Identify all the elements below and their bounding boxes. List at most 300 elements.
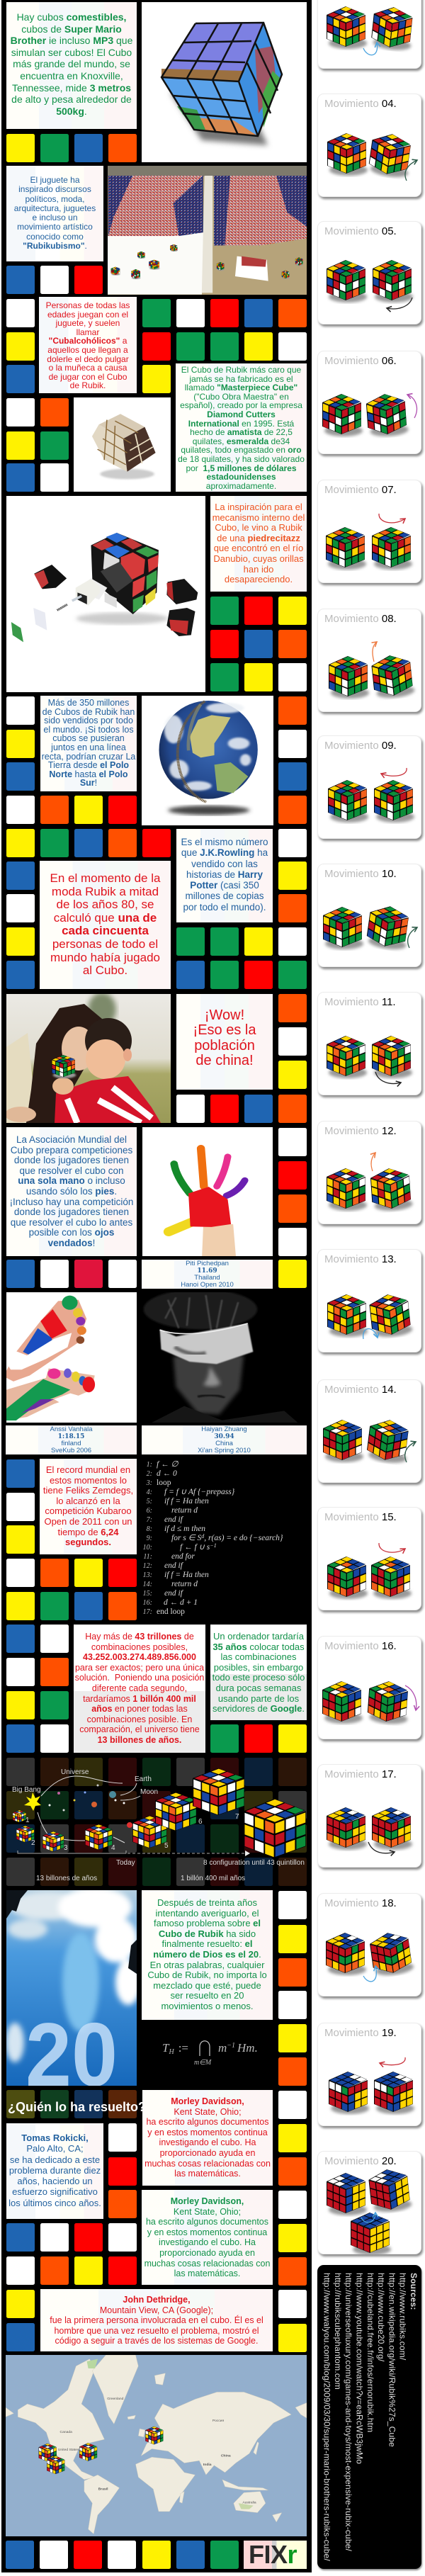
- panel: Tomas Rokicki: años, haciendo un: [17, 2176, 93, 2186]
- card: move 13: [317, 1249, 421, 1352]
- card: move 18: Movimiento 18.: [324, 1897, 397, 1909]
- sources panel: http://www.rubiks.com/: [398, 2273, 408, 2360]
- panel: John Dethridge: hombre que una vez resuelto el problema, mostró el: [54, 2326, 259, 2336]
- panel: Morley Davidson (green): proporcionado ayuda en: [159, 2248, 255, 2258]
- card: move 17: Movimiento 17.: [324, 1768, 397, 1780]
- caption: Anssi Vanhala: 1:18.15: [58, 1433, 84, 1440]
- panel: world record: tiempo de 6,24: [57, 1527, 119, 1537]
- image: mother and child with a cube: [6, 994, 171, 1123]
- panel: Masterpiece Cube: International en 1995. Está: [188, 419, 294, 429]
- panel: world cube association competitions: que resolver el cubo con: [19, 1165, 124, 1176]
- panel: 43 trillion combinations: solución. Poniendo una posición: [75, 1673, 204, 1683]
- panel: Masterpiece Cube: El Cubo de Rubik más caro que: [181, 365, 301, 375]
- algorithm listing: 1:: [147, 1461, 152, 1469]
- panel: world cube association competitions: que resolver el cubo lo antes: [11, 1217, 132, 1228]
- panel: political speeches and Rubikubism: e incluso un: [32, 213, 78, 222]
- world map with solver locations: India: [203, 2463, 212, 2466]
- panel: John Dethridge: [40, 2289, 273, 2351]
- panel: 43 trillion combinations: para ser exactos; pero una única: [75, 1663, 204, 1673]
- algorithm listing: 15:: [143, 1590, 152, 1598]
- panel: Morley Davidson (red): [142, 2090, 273, 2186]
- card: move 17: [317, 1764, 421, 1868]
- panel: 43 trillion combinations: [74, 1625, 205, 1753]
- chart: universe timeline with cubes: 4: [111, 1844, 115, 1852]
- panel: Morley Davidson (red): proporcionado ayuda en: [160, 2148, 255, 2158]
- panel: one in fifty people played: al Cubo.: [83, 964, 128, 977]
- algorithm listing: return d: [171, 1506, 198, 1515]
- algorithm listing: end if: [164, 1561, 184, 1570]
- panel: 350 million cubes sold: Tierra desde el Polo: [48, 760, 129, 770]
- panel: Cubalcoholicos: de jugar con el Cubo: [49, 372, 127, 382]
- algorithm listing: end loop: [157, 1608, 185, 1616]
- chart: universe timeline with cubes: Big Bang: [12, 1786, 41, 1794]
- panel: world record: competición Kubaroo: [45, 1506, 132, 1516]
- panel: computer time and Google: Un ordenador tardaría: [213, 1631, 304, 1642]
- panel: 350 million cubes sold: juntos en una línea: [51, 742, 126, 752]
- algorithm listing: 11:: [143, 1553, 152, 1561]
- algorithm listing: 10:: [143, 1544, 152, 1552]
- card: move 12: Movimiento 12.: [324, 1125, 397, 1137]
- caption: Haiyan Zhuang: [142, 1425, 307, 1454]
- algorithm listing: −1: [210, 1542, 217, 1549]
- algorithm listing: 12:: [143, 1562, 152, 1570]
- caption: Anssi Vanhala: Anssi Vanhala: [50, 1425, 93, 1433]
- panel: political speeches and Rubikubism: El juguete ha: [30, 175, 80, 185]
- panel: Morley Davidson (green): Kent State, Ohio;: [174, 2207, 241, 2217]
- image: blindfolded man: [143, 1292, 298, 1423]
- panel: world cube association competitions: posible con los ojos: [29, 1227, 114, 1238]
- sources panel: http://rubikscubephantom.com: [333, 2273, 343, 2390]
- panel: same number as J.K. Rowling sold: [176, 829, 273, 922]
- caption: Haiyan Zhuang: Haiyan Zhuang: [201, 1425, 247, 1433]
- chart: universe timeline with cubes: 1 billón 400 mil años: [181, 1875, 245, 1882]
- card: move 11: Movimiento 11.: [324, 996, 396, 1008]
- panel: 43 trillion combinations: diferente cada segundo,: [92, 1683, 187, 1693]
- panel: one in fifty people played: En el momento de la: [50, 871, 160, 885]
- panel: world cube association competitions: vendados!: [48, 1238, 95, 1248]
- panel: Masterpiece Cube: de 18 quilates, y ha sido valorado: [178, 454, 305, 464]
- heading background tiles: [6, 2090, 137, 2118]
- panel: one in fifty people played: de los años 80, se: [57, 898, 154, 911]
- card: move 07: Movimiento 07.: [324, 484, 397, 496]
- panel: John Dethridge: Mountain View, CA (Google);: [100, 2305, 213, 2315]
- panel: 350 million cubes sold: Norte hasta el Polo: [49, 769, 128, 779]
- world map with solver locations: United States: [58, 2448, 79, 2451]
- formula: m∈M: [194, 2059, 212, 2067]
- panel: 350 million cubes sold: cubos se pusieran: [52, 733, 125, 743]
- panel: inspiration for the mechanism: de una piedrecitazz: [217, 533, 300, 543]
- panel: Morley Davidson (green): [142, 2190, 273, 2285]
- panel: computer time and Google: las combinaciones: [221, 1651, 296, 1662]
- panel: Wow, the population of China: ¡Wow!: [205, 1007, 244, 1023]
- panel: Cubalcoholicos: [39, 297, 137, 393]
- card: move 07: [317, 480, 421, 583]
- card: move 03: [317, 0, 421, 69]
- panel: one in fifty people played: mundo había jugado: [50, 951, 160, 964]
- card: move 05: Movimiento 05.: [324, 225, 397, 237]
- panel: world record: tiene Feliks Zemdegs,: [43, 1485, 133, 1496]
- chart: universe timeline with cubes: [6, 1758, 307, 1886]
- panel: one in fifty people played: personas de todo el: [52, 937, 158, 951]
- panel: Tomas Rokicki: esfuerzo significativo: [12, 2186, 98, 2197]
- formula: T: [162, 2041, 169, 2055]
- card: move 08: Movimiento 08.: [324, 613, 397, 625]
- panel: Masterpiece Cube: por 1,5 millones de dólares: [186, 463, 297, 473]
- panel: same number as J.K. Rowling sold: vendido con las: [191, 859, 258, 869]
- card: move 12: [317, 1121, 421, 1224]
- panel: God's number is 20: Cubo de Rubik ha sido: [159, 1928, 256, 1939]
- panel: Morley Davidson (green): y en estos momentos continua: [147, 2227, 267, 2237]
- panel: 43 trillion combinations: comparación, el universo tiene: [79, 1724, 200, 1734]
- algorithm listing: loop: [157, 1479, 171, 1487]
- chart: universe timeline with cubes: 7: [235, 1813, 239, 1821]
- panel: edible and giant cubes: simulan ser cubos! El Cubo: [11, 47, 132, 58]
- panel: inspiration for the mechanism: que encontró en el río: [214, 543, 303, 553]
- panel: Masterpiece Cube: aproximadamente.: [206, 481, 276, 491]
- panel: Cubalcoholicos: "Cubalcohólicos" a: [49, 336, 127, 346]
- panel: Masterpiece Cube: Diamond Cutters: [207, 409, 276, 419]
- world map with solver locations: Canada: [60, 2430, 72, 2434]
- card: move 18: [317, 1893, 421, 1996]
- card: move 06: [317, 351, 421, 454]
- panel: Masterpiece Cube: jamás se ha fabricado es el: [189, 374, 293, 384]
- panel: Morley Davidson (red): las matemáticas.: [174, 2169, 241, 2179]
- panel: Morley Davidson (green): investigando el cubo. Ha: [159, 2237, 256, 2247]
- formula: H: [168, 2048, 174, 2056]
- panel: God's number is 20: mezclado que esté, puede: [153, 1980, 261, 1991]
- caption: Piti Pichedpan: [142, 1260, 273, 1289]
- panel: Cubalcoholicos: dolerle el dedo pulgar: [47, 354, 129, 364]
- panel: Tomas Rokicki: [6, 2123, 103, 2219]
- card: move 14: Movimiento 14.: [324, 1384, 397, 1396]
- panel: computer time and Google: [210, 1625, 307, 1720]
- card: move 10: Movimiento 10.: [324, 868, 397, 880]
- panel: God's number is 20: En otras palabras, cualquier: [150, 1960, 264, 1970]
- chart: universe timeline with cubes: 5: [164, 1842, 169, 1850]
- panel: God's number is 20: famoso problema sobre el: [154, 1918, 261, 1928]
- algorithm listing: end if: [164, 1589, 184, 1598]
- panel: 350 million cubes sold: de Cubos de Rubik han: [42, 707, 135, 717]
- panel: political speeches and Rubikubism: "Rubikubismo".: [23, 241, 87, 251]
- panel: world record: segundos.: [65, 1537, 111, 1547]
- panel: Cubalcoholicos: de Rubik.: [70, 380, 106, 390]
- world map with solver locations: [6, 2355, 307, 2536]
- card: move 09: [317, 735, 421, 839]
- panel: world record: El record mundial en: [46, 1464, 130, 1475]
- panel: 350 million cubes sold: Más de 350 millones: [48, 698, 129, 708]
- panel: Cubalcoholicos: aquellos que llegan a: [47, 345, 128, 355]
- card: move 14: [317, 1379, 421, 1483]
- panel: Cubalcoholicos: o la muñeca a causa: [49, 363, 127, 373]
- panel: Masterpiece Cube: español), creado por la empresa: [180, 400, 302, 410]
- formula: Hm.: [237, 2041, 258, 2055]
- panel: edible and giant cubes: de alto y pesa alrededor de: [11, 94, 132, 105]
- caption: Piti Pichedpan: Hanoi Open 2010: [181, 1281, 234, 1289]
- algorithm listing: if d ≤ m then: [164, 1525, 205, 1533]
- panel: political speeches and Rubikubism: inspirado discursos: [18, 184, 91, 194]
- panel: Morley Davidson (red): muchas cosas relacionadas con: [144, 2159, 271, 2169]
- panel: inspiration for the mechanism: Cubo, le vino a Rubik: [215, 522, 302, 533]
- chart: universe timeline with cubes: 13 billones de años: [36, 1875, 97, 1882]
- algorithm listing: 14:: [143, 1581, 152, 1588]
- card: move 04: Movimiento 04.: [324, 98, 397, 110]
- algorithm listing: 2:: [147, 1470, 152, 1478]
- heading text: ¿Quién lo ha resuelto?: [8, 2100, 146, 2114]
- panel: world cube association competitions: ¡Incluso hay una competición: [10, 1197, 133, 1207]
- panel: computer time and Google: servidores de Google.: [212, 1703, 305, 1714]
- algorithm listing: 17:: [143, 1608, 152, 1616]
- panel: Masterpiece Cube: hecho de amatista de 22,5: [190, 427, 293, 437]
- panel: world cube association competitions: donde los jugadores tienen: [14, 1155, 129, 1165]
- sources panel: http://www.youtube.com/watch?v=eaRcWB3jwMo: [355, 2273, 365, 2464]
- panel: Wow, the population of China: [176, 994, 273, 1090]
- chart: universe timeline with cubes: Earth: [135, 1775, 152, 1783]
- image: globe wrapped with cubes: [142, 696, 273, 825]
- panel: Masterpiece Cube: [176, 363, 307, 492]
- chart: universe timeline with cubes: Moon: [140, 1788, 158, 1796]
- card: move 06: Movimiento 06.: [324, 355, 397, 367]
- panel: Wow, the population of China: ¡Eso es la: [193, 1022, 256, 1038]
- algorithm listing: 9:: [147, 1535, 152, 1542]
- panel: God's number is 20: número de Dios es el 20.: [153, 1949, 261, 1960]
- panel: edible and giant cubes: [6, 2, 137, 129]
- panel: edible and giant cubes: Brother ie incluso MP3 que: [11, 35, 132, 46]
- caption: Piti Pichedpan: Piti Pichedpan: [186, 1260, 229, 1267]
- algorithm listing: d ← d + 1: [164, 1598, 198, 1607]
- panel: John Dethridge: fue la primera persona involucrada en el cubo. Él es el: [50, 2315, 264, 2325]
- algorithm listing: 6:: [147, 1507, 152, 1515]
- algorithm listing: 16:: [143, 1599, 152, 1607]
- panel: Tomas Rokicki: problema durante diez: [9, 2165, 101, 2176]
- panel: world cube association competitions: donde los jugadores tienen: [14, 1207, 129, 1217]
- algorithm listing: [143, 1460, 283, 1616]
- panel: 350 million cubes sold: [40, 696, 137, 791]
- panel: edible and giant cubes: Hay cubos comestibles,: [17, 11, 126, 23]
- panel: God's number is 20: ser resuelto en 20: [170, 1990, 244, 2001]
- panel: same number as J.K. Rowling sold: historias de Harry: [186, 869, 263, 880]
- card: move 09: Movimiento 09.: [324, 740, 397, 752]
- panel: inspiration for the mechanism: La inspiración para el: [215, 502, 302, 512]
- panel: same number as J.K. Rowling sold: Es el mismo número: [181, 837, 268, 847]
- panel: edible and giant cubes: Tennessee, mide 3 metros: [12, 82, 131, 94]
- algorithm listing: f = f ∪ Af {−prepass}: [164, 1488, 235, 1496]
- panel: inspiration for the mechanism: [210, 496, 307, 592]
- panel: edible and giant cubes: 500kg.: [56, 106, 87, 117]
- panel: 350 million cubes sold: recta, podrían cruzar La: [42, 752, 135, 762]
- panel: Cubalcoholicos: llamar: [76, 327, 99, 337]
- panel: world record: estos momentos lo: [50, 1475, 127, 1486]
- panel: inspiration for the mechanism: Danubio, cuyas orillas: [213, 553, 304, 564]
- algorithm listing: if f = Ha then: [164, 1571, 209, 1579]
- caption: Piti Pichedpan: 11.69: [197, 1267, 217, 1275]
- sources panel: [317, 2265, 421, 2569]
- panel: same number as J.K. Rowling sold: que J.K.Rowling ha: [181, 847, 268, 858]
- panel: Cubalcoholicos: edades juegan con el: [47, 310, 128, 320]
- card: move 08: [317, 609, 421, 712]
- panel: one in fifty people played: [40, 861, 171, 989]
- algorithm listing: end for: [171, 1552, 195, 1561]
- heading: who has solved it: [6, 2090, 146, 2118]
- panel: 350 million cubes sold: Sur!: [80, 778, 97, 788]
- panel: political speeches and Rubikubism: arquitectura, juguetes: [14, 203, 96, 213]
- panel: one in fifty people played: calculó que una de: [54, 911, 157, 925]
- image: Rubik mosaic portrait: [108, 166, 307, 295]
- card: move 20: [317, 2151, 421, 2254]
- algorithm listing: f ← f ∪ s: [180, 1543, 210, 1552]
- world map with solver locations: Australia: [242, 2501, 256, 2504]
- world map with solver locations: Brasil: [98, 2487, 108, 2491]
- panel: same number as J.K. Rowling sold: por todo el mundo).: [183, 902, 266, 913]
- sources panel: http://en.wikipedia.org/wiki/Rubik%27s_Cube: [387, 2273, 397, 2447]
- card: move 20: Movimiento 20.: [324, 2155, 397, 2167]
- black board background: [1, 0, 312, 2572]
- panel: computer time and Google: dura pocas semanas: [216, 1683, 301, 1693]
- panel: Masterpiece Cube: llamado "Masterpiece Cube": [185, 383, 298, 392]
- panel: Morley Davidson (red): ha escrito algunos documentos: [146, 2117, 269, 2127]
- algorithm listing: 7:: [147, 1516, 152, 1524]
- panel: political speeches and Rubikubism: [6, 166, 103, 261]
- panel: 43 trillion combinations: 13 billones de años.: [98, 1735, 181, 1745]
- panel: 43 trillion combinations: 43.252.003.274.489.856.000: [83, 1652, 196, 1662]
- algorithm listing: end if: [164, 1515, 184, 1524]
- panel: one in fifty people played: moda Rubik a mitad: [52, 885, 159, 898]
- panel: Masterpiece Cube: estadounidenses: [206, 472, 276, 482]
- panel: Tomas Rokicki: los últimos cinco años.: [8, 2198, 101, 2208]
- caption: Haiyan Zhuang: Xi'an Spring 2010: [198, 1447, 251, 1454]
- card: move 15: [317, 1507, 421, 1610]
- panel: world cube association competitions: Cubo prepara competiciones: [11, 1145, 132, 1156]
- caption: Piti Pichedpan: Thailand: [194, 1274, 220, 1282]
- panel: Masterpiece Cube: quilates, todo engastado en oro: [181, 445, 302, 455]
- panel: John Dethridge: John Dethridge,: [123, 2295, 191, 2305]
- card: move 19: [317, 2023, 421, 2126]
- panel: God's number is 20: [142, 1890, 273, 2020]
- formula: [162, 2040, 258, 2067]
- card: move 16: [317, 1636, 421, 1739]
- formula: :=: [178, 2041, 188, 2055]
- chart: universe timeline with cubes: 3: [64, 1844, 68, 1852]
- panel: Wow, the population of China: de china!: [196, 1053, 254, 1068]
- caption: Haiyan Zhuang: 30.94: [214, 1433, 234, 1440]
- panel: Cubalcoholicos: Personas de todas las: [46, 300, 130, 310]
- panel: edible and giant cubes: cubos de Super Mario: [21, 23, 122, 35]
- panel: Morley Davidson (green): ha escrito algunos documentos: [146, 2217, 268, 2227]
- algorithm listing: 4:: [147, 1488, 152, 1496]
- panel: Morley Davidson (red): investigando el cubo. Ha: [159, 2137, 256, 2147]
- panel: political speeches and Rubikubism: políticos, moda,: [25, 194, 85, 204]
- panel: world record: Open de 2011 con un: [44, 1516, 132, 1527]
- panel: Morley Davidson (green): las matemáticas.: [174, 2269, 240, 2278]
- image: hand painted in colours: [142, 1127, 273, 1256]
- panel: inspiration for the mechanism: mecanismo interno del: [212, 512, 305, 523]
- chart: universe timeline with cubes: 8 configuration until 43 quintillon: [203, 1859, 305, 1867]
- panel: computer time and Google: usando parte de los: [218, 1693, 299, 1704]
- algorithm listing: d: [201, 1533, 205, 1540]
- algorithm listing: 13:: [143, 1571, 152, 1579]
- panel: Morley Davidson (red): Morley Davidson,: [171, 2096, 244, 2106]
- world map with solver locations: Россия: [212, 2419, 225, 2422]
- panel: Morley Davidson (red): y en estos momentos continua: [147, 2128, 268, 2137]
- panel: computer time and Google: 35 años colocar todas: [212, 1642, 305, 1652]
- chart: universe timeline with cubes: 1: [26, 1817, 30, 1824]
- sources panel: http://universeofluxury.com/games-and-toys/most-expensive-rubix-cube/: [344, 2273, 353, 2551]
- panel: inspiration for the mechanism: han ido: [244, 564, 273, 575]
- panel: 350 million cubes sold: sido vendidos por todo: [44, 716, 133, 725]
- algorithm listing: if f = Ha then: [164, 1497, 209, 1506]
- sources panel: http://www.walyou.com/blog/2009/03/30/super-mario-brothers-rubiks-cube/: [322, 2273, 332, 2561]
- panel: edible and giant cubes: encuentra en Knoxville,: [20, 70, 123, 81]
- formula: −1: [227, 2042, 235, 2050]
- image: sky with the number 20: [6, 1890, 137, 2086]
- panel: world cube association competitions: una sola mano o incluso: [18, 1175, 125, 1186]
- panel: computer time and Google: posibles, sin embargo: [214, 1662, 303, 1673]
- panel: God's number is 20: intentando averiguarlo, el: [156, 1908, 259, 1919]
- caption: Anssi Vanhala: finland: [61, 1440, 81, 1447]
- panel: same number as J.K. Rowling sold: millones de copias: [185, 891, 264, 901]
- image: exploded cube mechanism: [6, 496, 205, 692]
- panel: computer time and Google: todo este proceso sólo: [212, 1672, 305, 1683]
- panel: Morley Davidson (green): muchas cosas relacionadas con: [144, 2259, 270, 2269]
- chart: universe timeline with cubes: 6: [198, 1818, 203, 1826]
- caption: Anssi Vanhala: [6, 1425, 137, 1454]
- panel: God's number is 20: Después de treinta años: [157, 1897, 257, 1908]
- panel: world record: [40, 1459, 137, 1554]
- image: diamond cube: [74, 397, 171, 492]
- formula: m: [218, 2041, 227, 2055]
- algorithm listing: return d: [171, 1580, 198, 1588]
- panel: 43 trillion combinations: años en poner todas las: [91, 1704, 188, 1714]
- world map with solver locations: China: [221, 2454, 231, 2457]
- panel: God's number is 20: movimientos o menos.: [161, 2001, 254, 2011]
- caption: Anssi Vanhala: SveKub 2006: [51, 1447, 91, 1454]
- panel: same number as J.K. Rowling sold: Potter (casi 350: [190, 880, 259, 891]
- algorithm listing: , r(as) = e do {−search}: [204, 1534, 283, 1542]
- panel: political speeches and Rubikubism: conocido como: [26, 232, 84, 242]
- chart: universe timeline with cubes: Universe: [61, 1768, 89, 1776]
- panel: Tomas Rokicki: Palo Alto, CA;: [26, 2143, 84, 2154]
- card: move 19: Movimiento 19.: [324, 2027, 397, 2039]
- panel: Tomas Rokicki: se ha dedicado a este: [10, 2154, 100, 2165]
- panel: world cube association competitions: [6, 1127, 137, 1256]
- card: move 05: [317, 221, 421, 324]
- panel: inspiration for the mechanism: desapareciendo.: [225, 574, 293, 584]
- algorithm listing: for s ∈ S: [171, 1534, 201, 1542]
- panel: 43 trillion combinations: combinaciones posible. En: [87, 1714, 192, 1724]
- panel: edible and giant cubes: más grande del mundo, se: [13, 58, 130, 69]
- caption: Haiyan Zhuang: China: [215, 1440, 233, 1447]
- image: painted foot: [6, 1292, 137, 1423]
- sources panel: http://cubeland.free.fr/infos/ernorubik.htm: [366, 2273, 375, 2432]
- image: Super Mario cube: [142, 2, 307, 162]
- panel: Masterpiece Cube: ("Cubo Obra Maestra" en: [193, 392, 289, 402]
- panel: God's number is 20: finalmente resuelto: el: [162, 1938, 252, 1949]
- panel: world cube association competitions: La Asociación Mundial del: [16, 1134, 127, 1145]
- panel: political speeches and Rubikubism: movimiento artístico: [17, 222, 93, 232]
- card: move 11: [317, 992, 421, 1095]
- panel: Tomas Rokicki: Tomas Rokicki,: [21, 2132, 89, 2143]
- panel: world cube association competitions: usando sólo los pies.: [26, 1186, 117, 1197]
- algorithm listing: 8:: [147, 1525, 152, 1533]
- panel: God's number is 20: Cubo de Rubik, no importa lo: [147, 1970, 267, 1980]
- card: move 15: Movimiento 15.: [324, 1511, 397, 1523]
- panel: world record: lo alcanzó en la: [56, 1496, 120, 1506]
- algorithm listing: 5:: [147, 1498, 152, 1506]
- panel: 350 million cubes sold: el mundo. ¡Si todos los: [43, 725, 134, 735]
- panel: Cubalcoholicos: juguete, y suelen: [56, 318, 120, 328]
- sources panel: Sources:: [409, 2273, 419, 2310]
- panel: John Dethridge: código a seguir a través de los sistemas de Google.: [55, 2336, 258, 2346]
- card: move 04: [317, 94, 421, 197]
